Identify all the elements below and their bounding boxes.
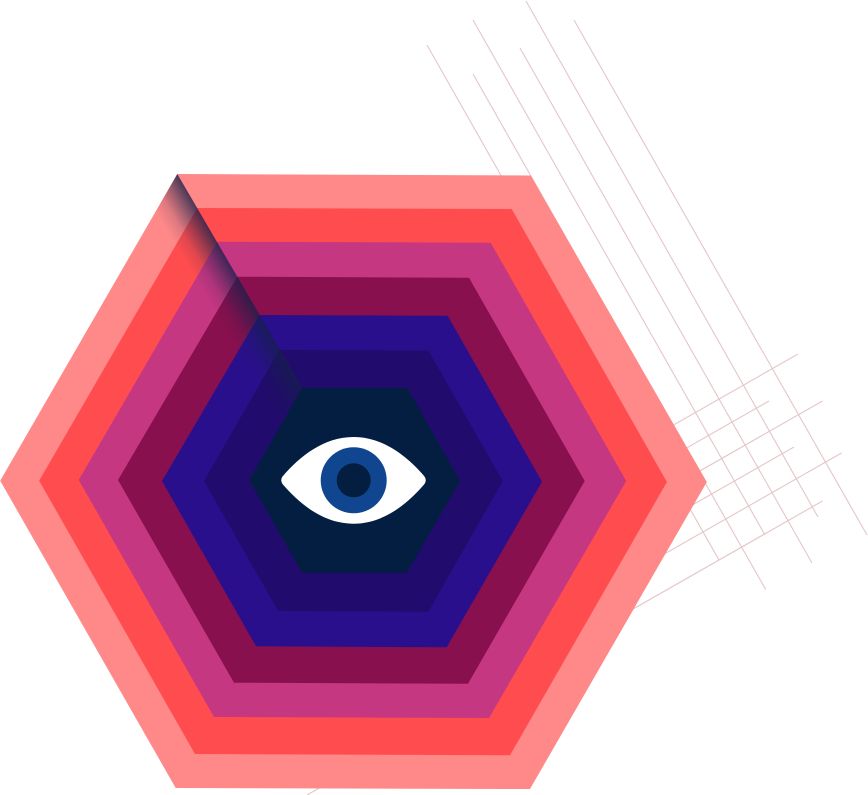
hexagon rings: [0, 174, 707, 789]
background grid lines: [254, 1, 867, 795]
eye white: [281, 437, 426, 524]
iris: [321, 447, 387, 513]
ring 1: light coral: [0, 174, 707, 789]
ring 4: crimson: [118, 277, 585, 684]
ring 7: navy centre: [249, 388, 460, 573]
ring 5: indigo: [162, 315, 542, 647]
ring 3: magenta: [79, 242, 626, 718]
ring 2: red: [39, 208, 667, 755]
fold shadow: [158, 174, 302, 404]
ring 6: dark violet: [204, 350, 503, 612]
icon: eye: [281, 437, 426, 524]
pupil: [337, 463, 371, 497]
